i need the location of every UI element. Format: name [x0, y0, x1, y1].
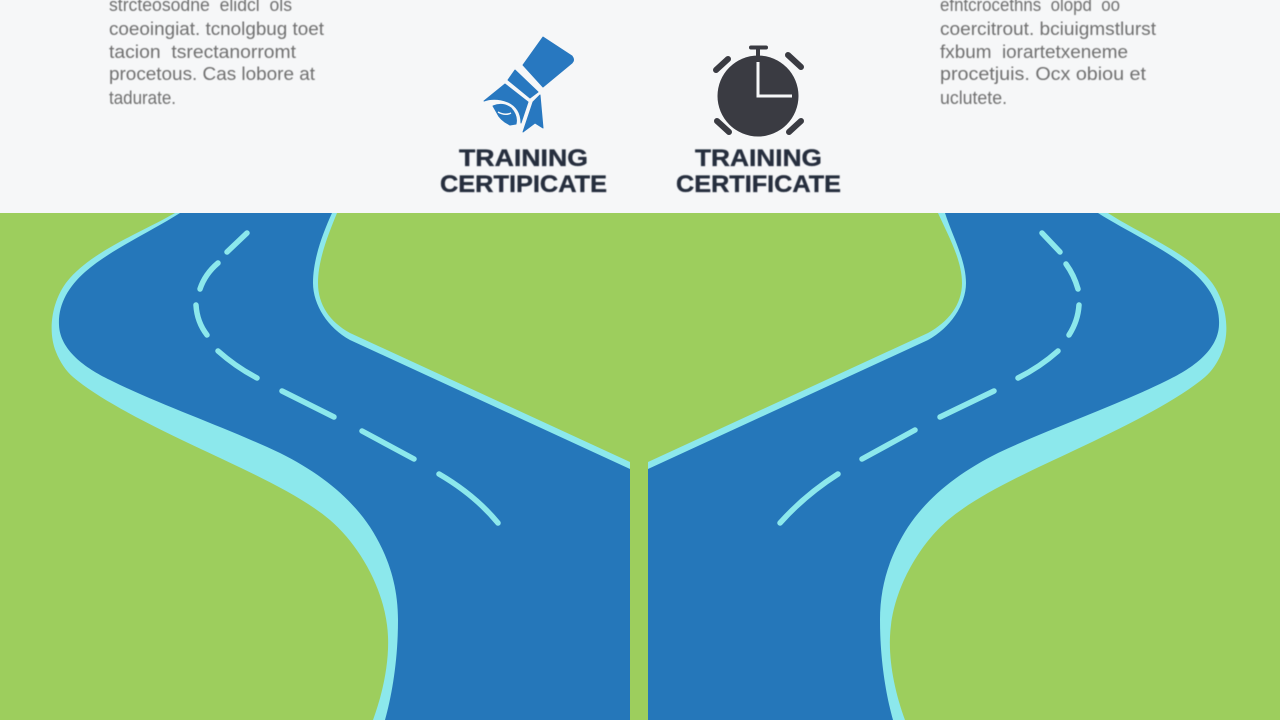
right road centre dashes [780, 233, 1079, 523]
text block: left description: coeoingiat. tcnolgbug toet [109, 19, 324, 39]
text block: right description: uclutete. [940, 88, 1007, 108]
text block: left description: procetous. Cas lobore at [109, 64, 315, 84]
heading: training certificate left: CERTIPICATE [440, 171, 607, 198]
heading: training certificate left: TRAINING [459, 145, 588, 172]
heading: training certificate right: CERTIFICATE [676, 171, 841, 198]
text block: left description: tadurate. [109, 88, 176, 108]
text block: right description: procetjuis. Ocx obiou et [940, 64, 1146, 84]
icon: stopwatch [716, 48, 801, 136]
icon: diploma scroll [484, 37, 574, 132]
heading: training certificate right: TRAINING [695, 145, 822, 172]
text block: right description: coercitrout. bciuigmstlurst [940, 19, 1156, 39]
heading: training certificate left [440, 145, 607, 198]
text block: left description [109, 0, 324, 108]
panel: green ground [0, 213, 1280, 720]
left road [52, 213, 630, 720]
right road [648, 213, 1226, 720]
text block: right description [940, 0, 1156, 108]
text block: left description: tacion tsrectanorromt [109, 42, 296, 62]
heading: training certificate right [676, 145, 841, 198]
left road centre dashes [196, 233, 498, 523]
text block: right description: fxbum iorartetxeneme [940, 42, 1128, 62]
